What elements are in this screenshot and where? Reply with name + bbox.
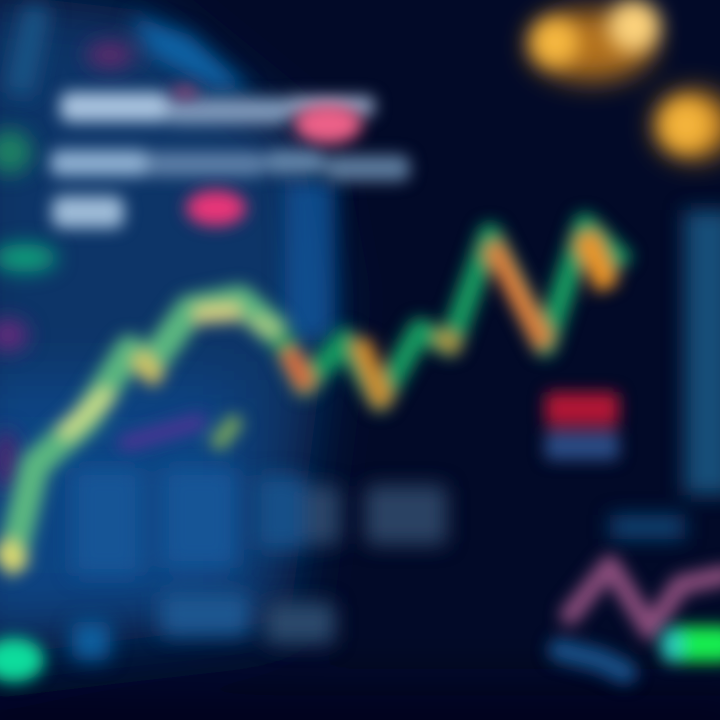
- candlestick trend line: [2, 225, 625, 570]
- orange bokeh lights: [530, 9, 720, 159]
- red and blue label at right: [545, 392, 619, 460]
- mini line chart bottom right: [560, 565, 720, 672]
- pink highlights: [171, 85, 362, 226]
- top diagonal streaks: [6, 3, 335, 340]
- headline text blurred: [50, 92, 410, 228]
- bright green bar: [660, 626, 720, 663]
- left edge green and purple marks: [0, 130, 57, 490]
- bottom left teal glow: [0, 638, 44, 682]
- right vertical data strip: [610, 210, 720, 539]
- lower blurred table blocks: [72, 468, 447, 660]
